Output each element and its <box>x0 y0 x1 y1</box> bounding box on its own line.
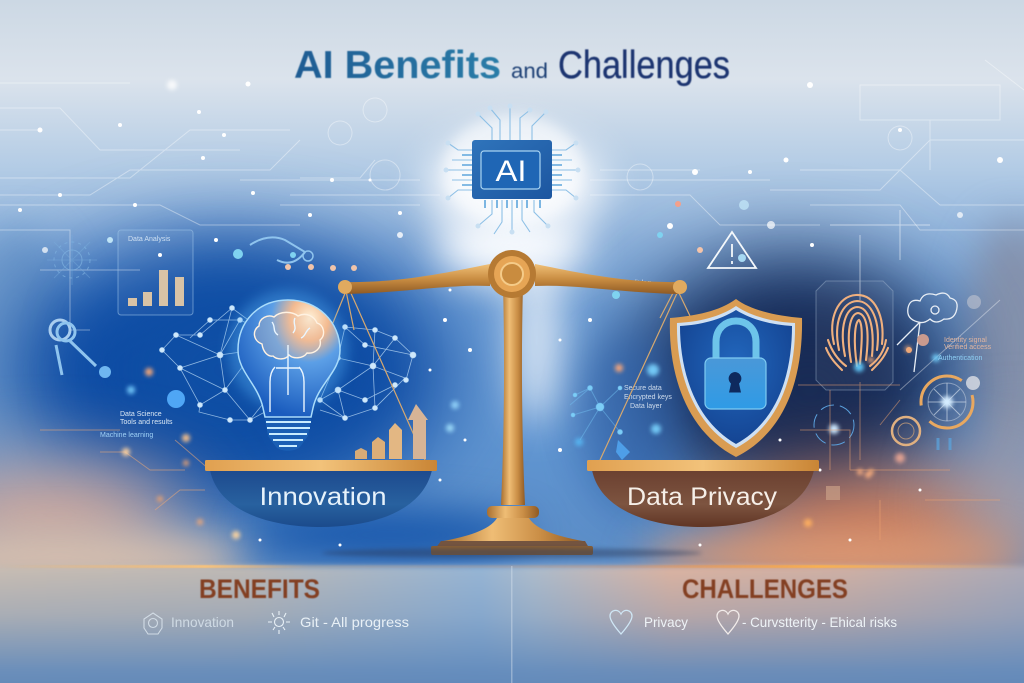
left side decor: warm dots <box>40 368 459 539</box>
benefit item: innovation <box>144 613 234 634</box>
title: and <box>511 60 548 83</box>
bulb base <box>265 419 311 451</box>
padlock <box>716 321 756 361</box>
right side decor: captions: Identity signal <box>944 337 987 344</box>
left side decor: captions: Tools and results <box>120 419 173 426</box>
right side decor: captions: Secure data <box>624 385 662 392</box>
circuit board lines <box>0 60 1024 390</box>
title: Challenges <box>558 44 730 87</box>
right side decor: captions: Authentication <box>938 355 982 362</box>
bulb with brain <box>228 290 348 451</box>
left side decor: robot arm <box>56 237 313 408</box>
right pan <box>587 460 819 527</box>
challenge item: privacy <box>610 610 688 634</box>
left side decor: bar chart panel: Data Analysis <box>128 236 171 243</box>
right side decor: warning triangle <box>708 232 756 268</box>
growth bars and arrows <box>355 404 428 459</box>
neural network left of bulb <box>160 306 290 422</box>
right side decor: captions: Verified access <box>944 344 992 351</box>
left side decor: bar chart panel <box>118 230 193 315</box>
left side decor: captions: Data Science <box>120 411 162 418</box>
horizon glow <box>0 548 1024 568</box>
challenge item: risks <box>717 610 897 634</box>
brain <box>254 312 324 359</box>
right side decor: fingerprint panel <box>816 281 893 390</box>
title <box>294 44 730 87</box>
post <box>501 285 525 505</box>
right side decor: gauge and rings <box>814 376 980 445</box>
balance scale <box>330 250 690 555</box>
benefit item: progress: Git - All progress <box>300 614 409 630</box>
data particles <box>18 80 1003 546</box>
right side decor: small network <box>570 386 630 460</box>
beam <box>345 264 490 294</box>
shield with lock <box>670 299 802 457</box>
right side decor: captions <box>600 280 992 410</box>
right side decor: captions: Access audit log <box>600 280 651 287</box>
title: AI Benefits <box>294 44 501 87</box>
challenge item: privacy: Privacy <box>644 614 688 630</box>
right side decor: cloud network <box>897 293 981 372</box>
left pan label: Innovation <box>260 483 386 511</box>
right pan label: Data Privacy <box>627 483 778 511</box>
left pan <box>205 460 437 527</box>
left side decor: captions: Machine learning <box>100 432 153 439</box>
stand base <box>443 518 583 541</box>
neural network right of bulb <box>318 324 416 420</box>
chip label: AI <box>496 155 526 188</box>
left pan strings <box>330 291 425 460</box>
challenge item: risks: - Curvstterity - Ehical risks <box>742 614 897 630</box>
left side decor: captions <box>100 411 173 439</box>
right side decor: captions: Encrypted keys <box>624 394 672 401</box>
right side decor: captions: Data layer <box>630 403 663 410</box>
benefits heading: BENEFITS <box>199 574 320 604</box>
center divider <box>511 566 512 683</box>
lower band <box>0 566 1024 683</box>
post collar <box>487 506 539 518</box>
benefit item: progress <box>268 611 409 634</box>
challenges heading: CHALLENGES <box>682 574 848 604</box>
benefit item: innovation: Innovation <box>171 614 234 630</box>
right pan strings <box>600 291 690 460</box>
left side decor: hub <box>47 235 97 285</box>
right side decor: orange circuit and dots <box>575 346 1000 540</box>
AI chip icon <box>443 104 583 234</box>
pivot <box>488 250 536 298</box>
